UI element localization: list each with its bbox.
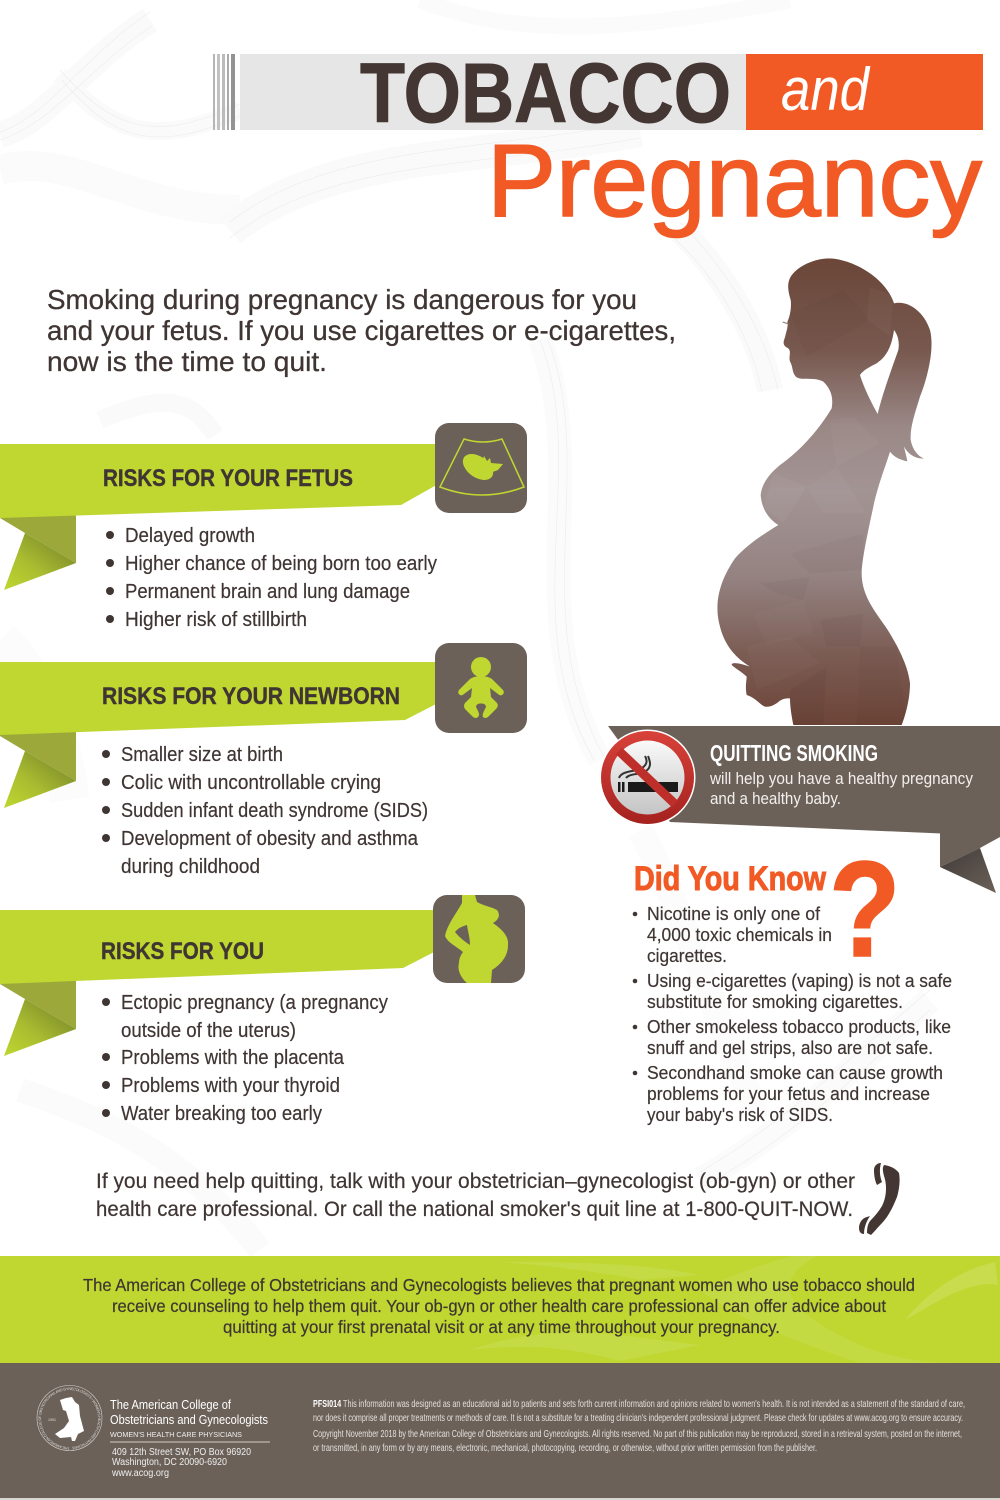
list: did you know facts: problems for your fetus and increase [647, 1083, 930, 1104]
logo: organization text [110, 1398, 270, 1479]
intro text: now is the time to quit. [47, 346, 327, 377]
list: newborn risks: Colic with uncontrollable crying [121, 772, 381, 794]
logo: organization text: WOMEN'S HEALTH CARE PHYSICIANS [110, 1430, 242, 1439]
ribbon: risks for your fetus [0, 444, 440, 590]
list: did you know facts: your baby's risk of SIDS. [647, 1104, 833, 1125]
list: risks for you: Problems with the placenta [121, 1047, 345, 1069]
list: fetus risks: Permanent brain and lung damage [125, 581, 410, 603]
ribbon: quitting smoking: will help you have a healthy pregnancy [709, 770, 974, 788]
green statement band: receive counseling to help them quit. Your ob-gyn or other health care professional can offer advice about [112, 1296, 886, 1316]
list: did you know facts: snuff and gel strips, also are not safe. [647, 1037, 933, 1058]
list: fetus risks [106, 525, 437, 631]
list: risks for you [102, 992, 388, 1125]
title: stripes and gray bar [213, 54, 746, 130]
logo: organization text: The American College of [110, 1398, 231, 1412]
ribbon: risks for your newborn [0, 662, 440, 808]
green statement band: quitting at your first prenatal visit or at any time throughout your pregnancy. [223, 1317, 780, 1337]
list: risks for you: outside of the uterus) [121, 1020, 296, 1042]
list: did you know facts: cigarettes. [647, 945, 727, 966]
footer: disclaimer text [313, 1398, 965, 1454]
intro text [47, 284, 676, 377]
title: Pregnancy: Pregnancy [487, 123, 982, 238]
footer band [0, 1363, 1000, 1500]
icon: ultrasound [435, 423, 527, 513]
list: fetus risks: Delayed growth [125, 525, 255, 547]
logo: organization text: Obstetricians and Gynecologists [110, 1413, 268, 1427]
list: did you know facts: Using e-cigarettes (vaping) is not a safe [647, 970, 952, 991]
intro text: and your fetus. If you use cigarettes or e-cigarettes, [47, 315, 676, 346]
title: and box: and [781, 56, 870, 123]
list: did you know facts: substitute for smoking cigarettes. [647, 991, 903, 1012]
logo: organization text: 409 12th Street SW, PO Box 96920 [112, 1447, 251, 1458]
logo: organization text: Washington, DC 20090-6920 [112, 1457, 227, 1468]
list: did you know facts: Secondhand smoke can cause growth [647, 1062, 943, 1083]
logo: seal: 1951 [48, 1418, 56, 1422]
heading: did you know: Did You Know [634, 860, 826, 898]
quit line text [96, 1169, 855, 1221]
ribbon: risks for your newborn: RISKS FOR YOUR NEWBORN [102, 683, 400, 710]
icon: pregnant figure [433, 895, 525, 983]
icon: baby [435, 643, 527, 733]
list: did you know facts: 4,000 toxic chemicals in [647, 924, 832, 945]
icon: question mark: ? [829, 833, 900, 985]
ribbon: risks for your fetus: RISKS FOR YOUR FETUS [103, 465, 353, 492]
background: faint smoke waves [0, 0, 930, 1250]
list: newborn risks: Development of obesity and asthma [121, 828, 419, 850]
list: risks for you: Problems with your thyroid [121, 1075, 340, 1097]
list: did you know facts: Nicotine is only one of [647, 903, 821, 924]
list: newborn risks [102, 744, 428, 878]
list: did you know facts: Other smokeless tobacco products, like [647, 1016, 951, 1037]
quit line text: If you need help quitting, talk with your obstetrician–gynecologist (ob-gyn) or other [96, 1169, 855, 1193]
quit line text: health care professional. Or call the national smoker's quit line at 1-800-QUIT-NOW. [96, 1197, 853, 1221]
title: and box [746, 54, 983, 130]
icon: no smoking sign [600, 730, 696, 826]
list: newborn risks: Sudden infant death syndrome (SIDS) [121, 800, 428, 822]
list: fetus risks: Higher chance of being born too early [125, 553, 437, 575]
green statement band: The American College of Obstetricians and Gynecologists believes that pregnant women who use tobacco should [83, 1275, 915, 1295]
ribbon: risks for you [0, 910, 438, 1056]
ribbon: quitting smoking [608, 726, 1000, 893]
list: fetus risks: Higher risk of stillbirth [125, 609, 307, 631]
ribbon: risks for you: RISKS FOR YOU [101, 938, 264, 965]
icon: telephone handset [859, 1163, 900, 1235]
intro text: Smoking during pregnancy is dangerous for you [47, 284, 637, 315]
list: newborn risks: during childhood [121, 856, 260, 878]
green statement band [0, 1248, 1000, 1363]
logo: organization text: www.acog.org [111, 1468, 169, 1479]
list: did you know facts [633, 903, 952, 1125]
list: risks for you: Ectopic pregnancy (a pregnancy [121, 992, 388, 1014]
pregnant woman silhouette [718, 258, 932, 725]
ribbon: quitting smoking: and a healthy baby. [710, 790, 841, 808]
ribbon: quitting smoking: QUITTING SMOKING [710, 740, 878, 766]
title: TOBACCO: TOBACCO [360, 46, 731, 140]
logo: seal: THE AMERICAN COLLEGE OF OBSTETRICIANS AND GYNECOLOGISTS • WOMEN'S HEALTH CARE PHYSICIANS [38, 1388, 101, 1450]
list: newborn risks: Smaller size at birth [121, 744, 283, 766]
list: risks for you: Water breaking too early [121, 1103, 322, 1125]
